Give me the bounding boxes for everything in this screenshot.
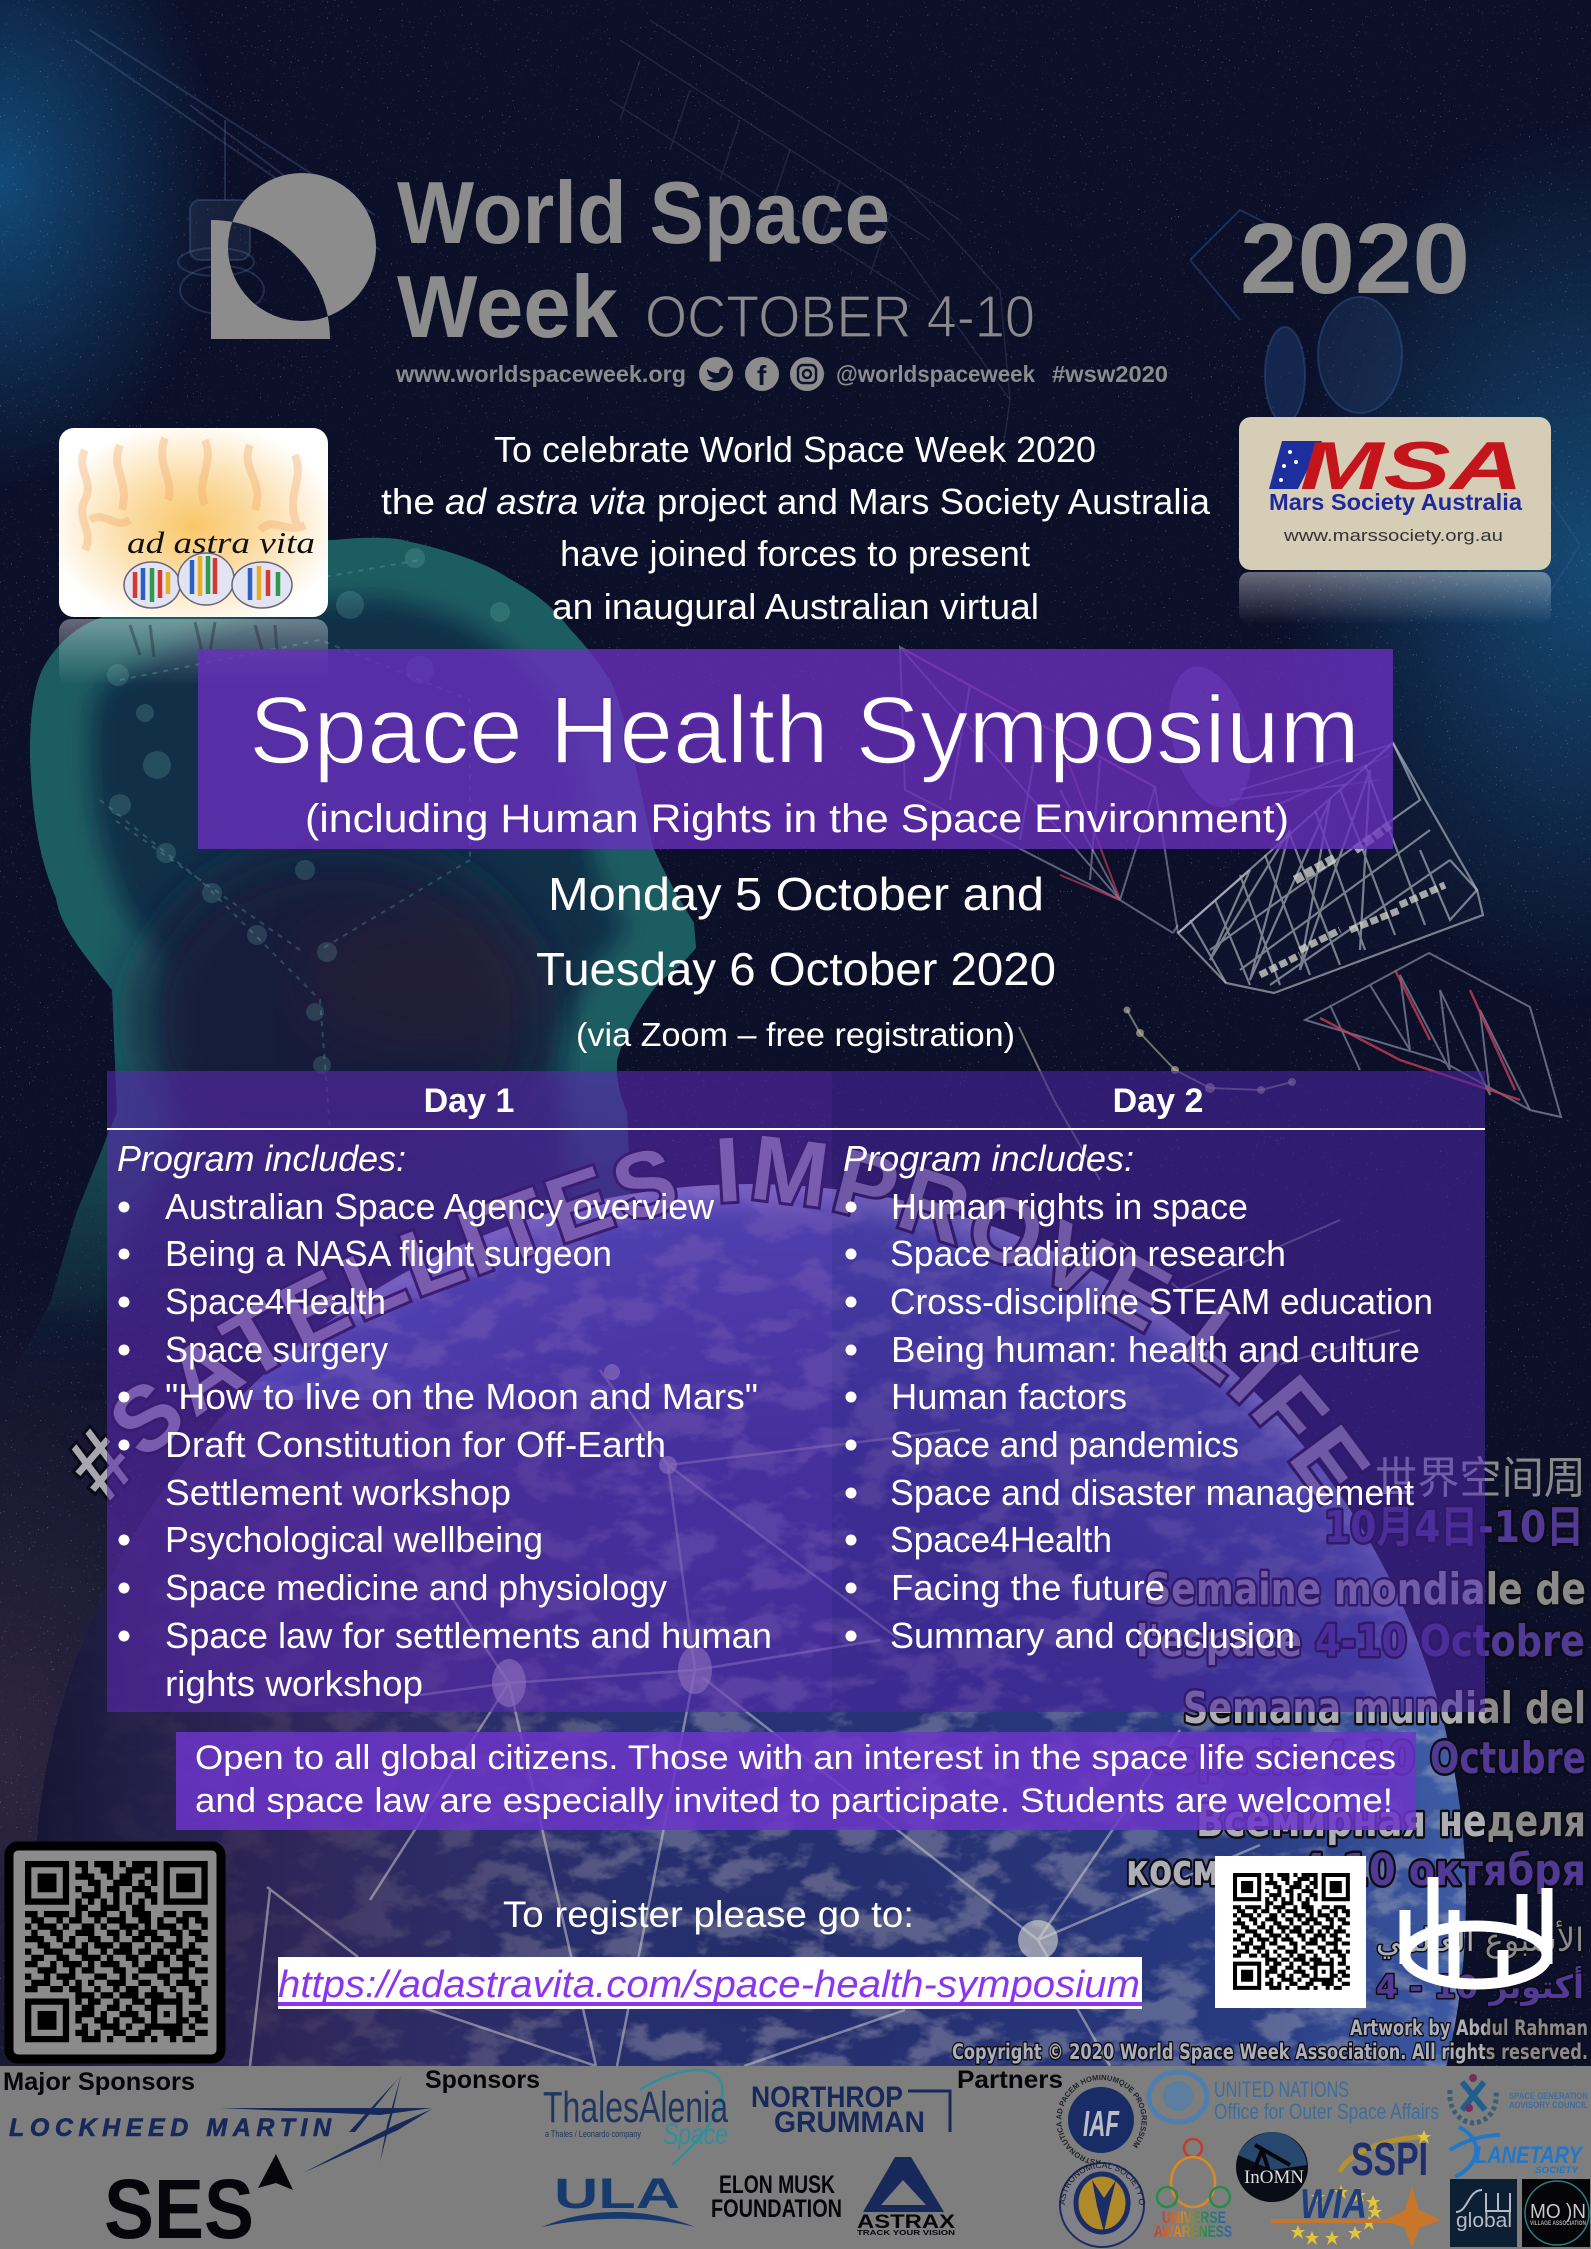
logo: Planetary Society bbox=[1450, 2127, 1584, 2177]
list: Day 2 program: Space4Health bbox=[890, 1519, 1112, 1560]
heading: Week: Week bbox=[397, 257, 619, 356]
background: multilingual World Space Week text: космоса bbox=[1126, 1845, 1286, 1896]
date: October 4-10: OCTOBER 4-10 bbox=[645, 284, 1035, 350]
logo: IAF: IAF bbox=[1083, 2103, 1120, 2144]
panel: Day 2 column bbox=[832, 1071, 1485, 1712]
background: earth globe bbox=[30, 1180, 1470, 2066]
intro text: have joined forces to present bbox=[560, 533, 1030, 574]
logo: Mars Society Australia: www.marssociety.org.au bbox=[1283, 526, 1503, 545]
list: Day 1 program: Space law for settlements and human bbox=[165, 1615, 772, 1656]
hashtag: #wsw2020 bbox=[1052, 361, 1168, 387]
callout: open to all bbox=[176, 1732, 1416, 1830]
logo: SSPI bbox=[1340, 2130, 1431, 2185]
title: Space Health Symposium bbox=[249, 677, 1360, 784]
background: multilingual World Space Week text: 世界空间周 bbox=[1375, 1453, 1586, 1504]
list: Day 1 program bbox=[117, 1138, 772, 1704]
list: Day 1 program: rights workshop bbox=[165, 1663, 423, 1704]
logo: ad astra vita bbox=[59, 428, 328, 617]
background: teal head silhouette bbox=[30, 538, 696, 1354]
logo: Elon Musk Foundation: FOUNDATION bbox=[711, 2195, 842, 2223]
logo: Astrax bbox=[857, 2157, 955, 2237]
background: curved slogan: #SATELLITES IMPROVE LIFE bbox=[68, 1135, 1371, 1508]
callout: open to all: Open to all global citizens. Those with an interest in the space life sciences bbox=[195, 1739, 1396, 1777]
website: www.worldspaceweek.org bbox=[395, 361, 686, 387]
background: constellation network bbox=[250, 1006, 1400, 2066]
intro text: project and Mars Society Australia bbox=[657, 481, 1211, 522]
list: Day 2 program: Space and pandemics bbox=[890, 1424, 1239, 1465]
list: Day 1 program: Space medicine and physiology bbox=[165, 1567, 667, 1608]
list: Day 2 program: Summary and conclusion bbox=[890, 1615, 1295, 1656]
logo: Thales Alenia Space: ThalesAlenia bbox=[543, 2083, 728, 2132]
title banner bbox=[198, 649, 1393, 849]
icons: social media bbox=[699, 357, 824, 391]
logo: Universe Awareness bbox=[1154, 2139, 1232, 2241]
logo: United Nations OOSA: UNITED NATIONS bbox=[1214, 2077, 1349, 2102]
logo: WIA bbox=[1271, 2180, 1441, 2248]
event dates: Monday 5 October and bbox=[548, 868, 1044, 920]
logo: Northrop Grumman: GRUMMAN bbox=[774, 2106, 925, 2139]
logo: Northrop Grumman: NORTHROP bbox=[751, 2081, 903, 2114]
logo: WIA: WIA bbox=[1300, 2180, 1367, 2227]
logo: Space Generation Advisory Council bbox=[1450, 2074, 1588, 2123]
logo: Universe Awareness: AWARENESS bbox=[1154, 2222, 1232, 2241]
logo: Thales Alenia Space: a Thales / Leonardo company bbox=[545, 2129, 641, 2139]
icon: World Space Week mark bbox=[211, 173, 376, 339]
logo: Astrax: TRACK YOUR VISION bbox=[857, 2230, 955, 2237]
logo: Astrax: ASTRAX bbox=[857, 2212, 955, 2233]
icons: social media: f bbox=[757, 360, 767, 391]
list: Day 1 program: Draft Constitution for Off-Earth bbox=[165, 1424, 666, 1465]
logo: Lockheed Martin bbox=[9, 2075, 432, 2173]
list: Day 2 program: Space radiation research bbox=[890, 1233, 1286, 1274]
intro text bbox=[381, 429, 1211, 627]
list: Day 2 program: Human factors bbox=[891, 1376, 1127, 1417]
background: multilingual World Space Week text: 4 - 10 أكتوبر bbox=[1376, 1966, 1584, 2006]
logo: Mars Society Australia: MSA bbox=[1300, 428, 1523, 504]
list: Day 2 program: Program includes: bbox=[843, 1138, 1134, 1179]
heading: World Space: World Space bbox=[397, 163, 890, 262]
list: Day 2 program: Being human: health and culture bbox=[891, 1329, 1420, 1370]
logo: ULA: ULA bbox=[554, 2170, 680, 2218]
logo: Elon Musk Foundation bbox=[711, 2171, 842, 2223]
logo: United Nations OOSA bbox=[1149, 2072, 1439, 2124]
wireframe: right satellite body bbox=[1190, 210, 1580, 600]
background: multilingual World Space Week text: espacio 4-10 bbox=[1150, 1733, 1415, 1784]
heading: Partners: Partners bbox=[957, 2066, 1063, 2094]
QR code: right bbox=[1215, 1856, 1366, 2008]
intro text: the bbox=[381, 481, 435, 522]
callout: open to all: and space law are especially invited to participate. Students are welcome! bbox=[195, 1782, 1393, 1820]
wireframe: lower truss bbox=[1305, 953, 1561, 1117]
list: Day 2 program: Cross-discipline STEAM education bbox=[890, 1281, 1433, 1322]
event dates: (via Zoom – free registration) bbox=[576, 1016, 1015, 1053]
logo: Lockheed Martin: LOCKHEED MARTIN bbox=[9, 2114, 332, 2142]
logo: Moon Village Association bbox=[1522, 2179, 1590, 2247]
social handle: @worldspaceweek bbox=[836, 361, 1035, 387]
logo: ULA bbox=[542, 2170, 695, 2227]
heading: Major Sponsors: Major Sponsors bbox=[3, 2068, 195, 2096]
wireframe: antenna truss body bbox=[1178, 743, 1483, 993]
event dates: Tuesday 6 October 2020 bbox=[536, 943, 1056, 995]
World Space Week logo block bbox=[211, 163, 1470, 391]
logo: Astronomical Society of the Pacific: ASTRONOMICAL SOCIETY OF THE PACIFIC bbox=[1059, 2162, 1145, 2205]
logo: ad astra vita: ad astra vita bbox=[127, 525, 315, 560]
subtitle: (including Human Rights in the Space Environment) bbox=[305, 797, 1289, 841]
logo: Thales Alenia Space bbox=[543, 2070, 728, 2165]
panel: Day 1 column bbox=[107, 1071, 832, 1712]
logo: Astronomical Society of the Pacific bbox=[1059, 2162, 1145, 2248]
background: multilingual World Space Week text: Всемирная bbox=[1196, 1796, 1426, 1847]
table header rule bbox=[107, 1128, 1485, 1130]
list: Day 2 program bbox=[843, 1138, 1433, 1656]
list: Day 1 program: Space4Health bbox=[165, 1281, 386, 1322]
background: multilingual World Space Week text bbox=[952, 1453, 1588, 2064]
list: Day 1 program: Psychological wellbeing bbox=[165, 1519, 543, 1560]
background: multilingual World Space Week text: الأسبوع العالمي للفضاء bbox=[1277, 1920, 1584, 1959]
logo: Mars Society Australia: Mars Society Australia bbox=[1269, 489, 1522, 515]
list: Day 1 program: "How to live on the Moon and Mars" bbox=[165, 1376, 758, 1417]
program table bbox=[107, 1071, 1485, 1712]
logo: Thales Alenia Space: Space bbox=[663, 2118, 728, 2151]
event dates bbox=[536, 868, 1056, 1053]
logo: InOMN bbox=[1236, 2132, 1308, 2202]
logo: InOMN: InOMN bbox=[1244, 2167, 1304, 2188]
icon: white ring logo bbox=[1405, 1877, 1547, 1984]
list: Day 1 program: Program includes: bbox=[117, 1138, 406, 1179]
list: Day 1 program: Space surgery bbox=[165, 1329, 388, 1370]
QR code: left bbox=[9, 1846, 221, 2059]
heading: Sponsors: Sponsors bbox=[425, 2066, 540, 2094]
background: wireframe satellites bbox=[75, 20, 1580, 1117]
wireframe: top left satellite bbox=[75, 30, 380, 314]
list: Day 1 program: Being a NASA flight surgeon bbox=[165, 1233, 612, 1274]
intro text: To celebrate World Space Week 2020 bbox=[494, 429, 1096, 470]
icon: DNA helix bbox=[124, 553, 292, 608]
logo: Mars Society Australia bbox=[1239, 417, 1551, 570]
registration link: https://adastravita.com/space-health-symposium bbox=[278, 1964, 1140, 2006]
logo: IAF: ASTRONAUTICA AD PACEM HOMINUMQUE PROGRESSUM bbox=[1056, 2074, 1147, 2164]
logo: Universe Awareness: UNIVERSE bbox=[1162, 2208, 1226, 2227]
logo: Moon Village Association: MO )N bbox=[1530, 2201, 1586, 2223]
list: Day 1 program: Settlement workshop bbox=[165, 1472, 511, 1513]
wireframe: antenna boom bbox=[900, 647, 1390, 933]
wireframe: top solar panel bbox=[610, 20, 1010, 470]
list: Day 1 program: Australian Space Agency overview bbox=[165, 1186, 715, 1227]
intro text: ad astra vita bbox=[445, 481, 646, 522]
background: multilingual World Space Week text: l'espace bbox=[1136, 1616, 1302, 1667]
register text: To register please go to: bbox=[503, 1894, 914, 1935]
list: Day 2 program: Facing the future bbox=[891, 1567, 1165, 1608]
logo: Planetary Society: SOCIETY bbox=[1535, 2165, 1579, 2175]
logo: Northrop Grumman bbox=[751, 2081, 950, 2139]
icon: Australian flag parallelogram bbox=[1269, 441, 1322, 489]
logo: SW global bbox=[1450, 2179, 1517, 2247]
logo: SW global: global bbox=[1456, 2210, 1512, 2232]
logo reflection: Mars Society Australia bbox=[1239, 572, 1551, 624]
logo: United Nations OOSA: Office for Outer Space Affairs bbox=[1214, 2099, 1439, 2124]
intro text: an inaugural Australian virtual bbox=[552, 586, 1039, 627]
list: Day 2 program: Human rights in space bbox=[891, 1186, 1248, 1227]
logo: SSPI: SSPI bbox=[1351, 2133, 1428, 2185]
year 2020: 2020 bbox=[1240, 203, 1470, 315]
heading: Day 2: Day 2 bbox=[1113, 1082, 1203, 1120]
list: Day 2 program: Space and disaster management bbox=[890, 1472, 1414, 1513]
logo reflection: ad astra vita bbox=[59, 619, 328, 685]
heading: Day 1: Day 1 bbox=[424, 1082, 514, 1120]
logo: Elon Musk Foundation: ELON MUSK bbox=[719, 2171, 835, 2199]
